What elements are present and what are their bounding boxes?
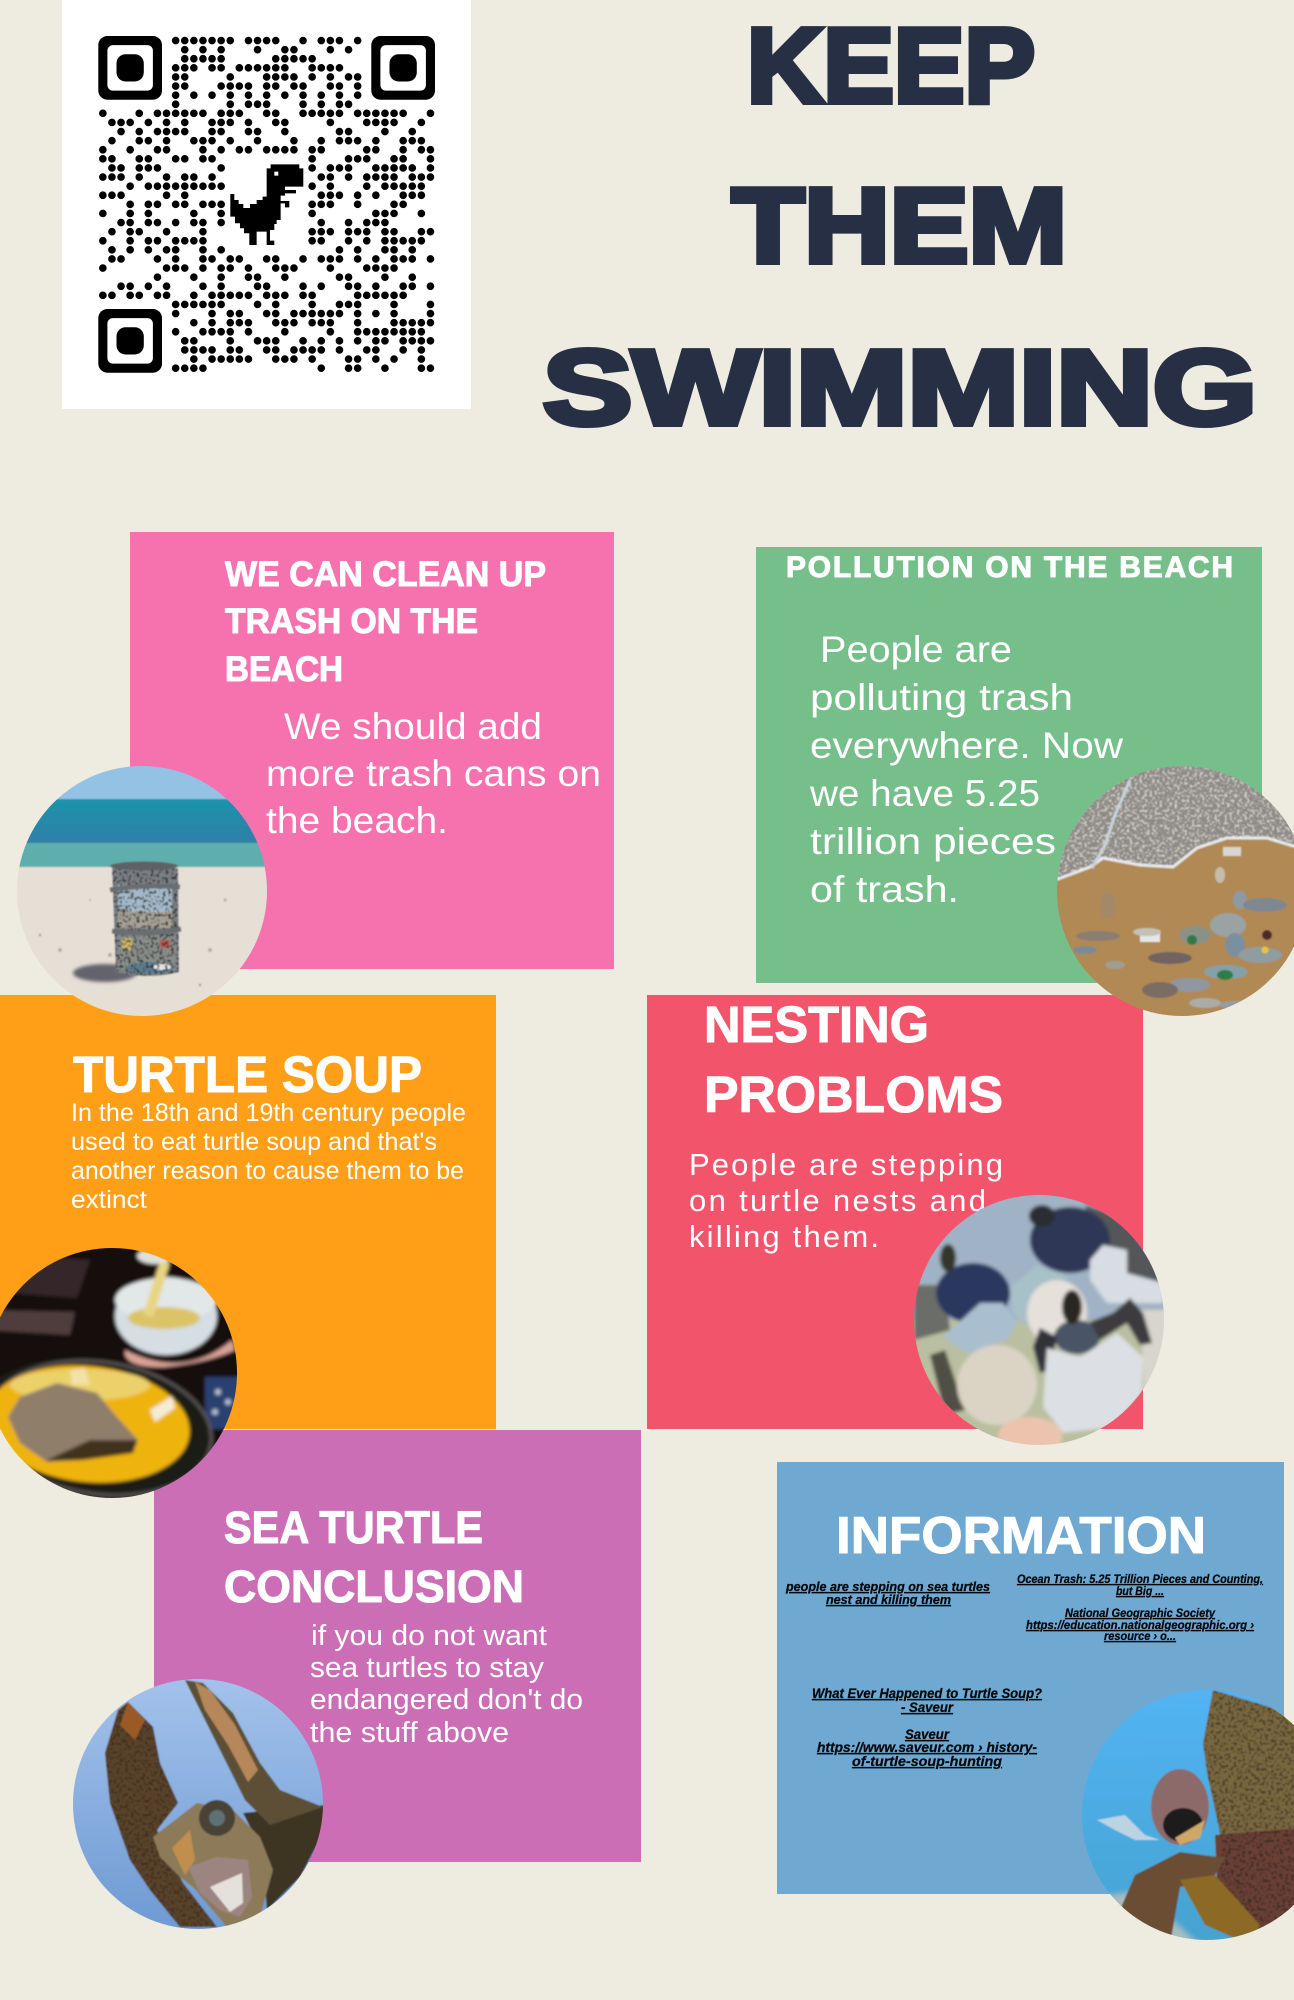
- photo: polluted beach: [1050, 760, 1294, 1022]
- panel: information: [777, 1462, 1284, 1894]
- body text: of trash.: [810, 869, 959, 910]
- body text: on turtle nests and: [689, 1183, 986, 1218]
- QR data dots: [103, 41, 430, 368]
- body text: the stuff above: [310, 1717, 509, 1749]
- heading: we can clean up trash on the beach: TRASH ON THE: [225, 602, 478, 641]
- panel: sea turtle conclusion: [154, 1430, 641, 1862]
- source: ocean trash: [1017, 1574, 1263, 1643]
- photo: sea turtle open mouth: [73, 1679, 323, 1929]
- body text: We should add: [284, 706, 542, 747]
- source: turtle soup: Saveur: [905, 1727, 950, 1742]
- heading: pollution on the beach: POLLUTION ON THE BEACH: [786, 551, 1233, 584]
- QR code modules: [98, 36, 435, 373]
- source: ocean trash: but Big ...: [1116, 1586, 1164, 1598]
- heading: nesting probloms: [704, 996, 1003, 1123]
- source: turtle soup: What Ever Happened to Turtle Soup?: [812, 1686, 1042, 1701]
- source: turtle soup: [812, 1686, 1042, 1769]
- source: ocean trash: https://education.nationalgeographic.org ›: [1026, 1620, 1254, 1632]
- source: turtle soup: https://www.saveur.com › history-: [817, 1740, 1038, 1755]
- source: nesting note: [785, 1580, 990, 1607]
- heading: sea turtle conclusion: SEA TURTLE: [224, 1502, 483, 1553]
- source: nesting note: nest and killing them: [826, 1593, 951, 1607]
- body text: [689, 1147, 1003, 1254]
- body text: polluting trash: [810, 677, 1073, 718]
- photo: sea turtle with flipper: [1075, 1682, 1294, 1948]
- source: ocean trash: resource › o...: [1104, 1631, 1176, 1643]
- body text: [71, 1099, 466, 1214]
- body text: everywhere. Now: [810, 725, 1123, 766]
- heading: sea turtle conclusion: CONCLUSION: [224, 1561, 524, 1612]
- body text: killing them.: [689, 1219, 879, 1254]
- heading: sea turtle conclusion: [224, 1502, 524, 1612]
- body text: used to eat turtle soup and that's: [71, 1128, 437, 1156]
- heading: information: INFORMATION: [836, 1507, 1206, 1565]
- body text: [809, 629, 1123, 910]
- body text: People are: [820, 629, 1012, 670]
- body text: extinct: [71, 1186, 147, 1214]
- body text: we have 5.25: [809, 773, 1040, 814]
- body text: sea turtles to stay: [310, 1652, 545, 1684]
- source: turtle soup: of-turtle-soup-hunting: [852, 1754, 1003, 1769]
- panel: pollution on the beach: [756, 547, 1262, 983]
- body text: the beach.: [266, 800, 448, 841]
- body text: In the 18th and 19th century people: [71, 1099, 466, 1127]
- panel: nesting problems: [647, 995, 1143, 1429]
- body text: [266, 706, 601, 841]
- title: SWIMMING: [543, 329, 1257, 447]
- source: ocean trash: National Geographic Society: [1065, 1608, 1216, 1620]
- title: KEEP: [747, 7, 1035, 125]
- QR code panel: [62, 0, 471, 409]
- body text: more trash cans on: [266, 753, 601, 794]
- body text: another reason to cause them to be: [71, 1157, 464, 1185]
- source: nesting note: people are stepping on sea turtles: [785, 1580, 990, 1594]
- panel: turtle soup: [0, 995, 496, 1429]
- photo: trash can on beach: [10, 760, 275, 1022]
- heading: nesting probloms: NESTING: [704, 996, 929, 1053]
- body text: trillion pieces: [810, 821, 1056, 862]
- body text: People are stepping: [689, 1147, 1003, 1182]
- photo: turtle soup dish: [0, 1248, 237, 1498]
- title: THEM: [732, 167, 1067, 285]
- body text: [310, 1620, 583, 1749]
- source: ocean trash: Ocean Trash: 5.25 Trillion Pieces and Counting,: [1017, 1574, 1263, 1586]
- body text: endangered don't do: [310, 1684, 583, 1716]
- source: turtle soup: - Saveur: [901, 1700, 954, 1715]
- heading: nesting probloms: PROBLOMS: [704, 1066, 1003, 1123]
- body text: if you do not want: [311, 1620, 547, 1652]
- title: [543, 7, 1257, 447]
- heading: we can clean up trash on the beach: [225, 555, 546, 689]
- photo: hatching turtles: [914, 1195, 1164, 1445]
- icon: pixel dinosaur: [230, 164, 303, 245]
- heading: turtle soup: TURTLE SOUP: [73, 1046, 422, 1103]
- finder pattern: bottom left: [98, 309, 162, 373]
- heading: we can clean up trash on the beach: BEACH: [225, 650, 343, 689]
- panel: we can clean up trash: [130, 532, 614, 969]
- heading: we can clean up trash on the beach: WE CAN CLEAN UP: [225, 555, 546, 594]
- finder pattern: top left: [98, 36, 162, 100]
- finder pattern: top right: [371, 36, 435, 100]
